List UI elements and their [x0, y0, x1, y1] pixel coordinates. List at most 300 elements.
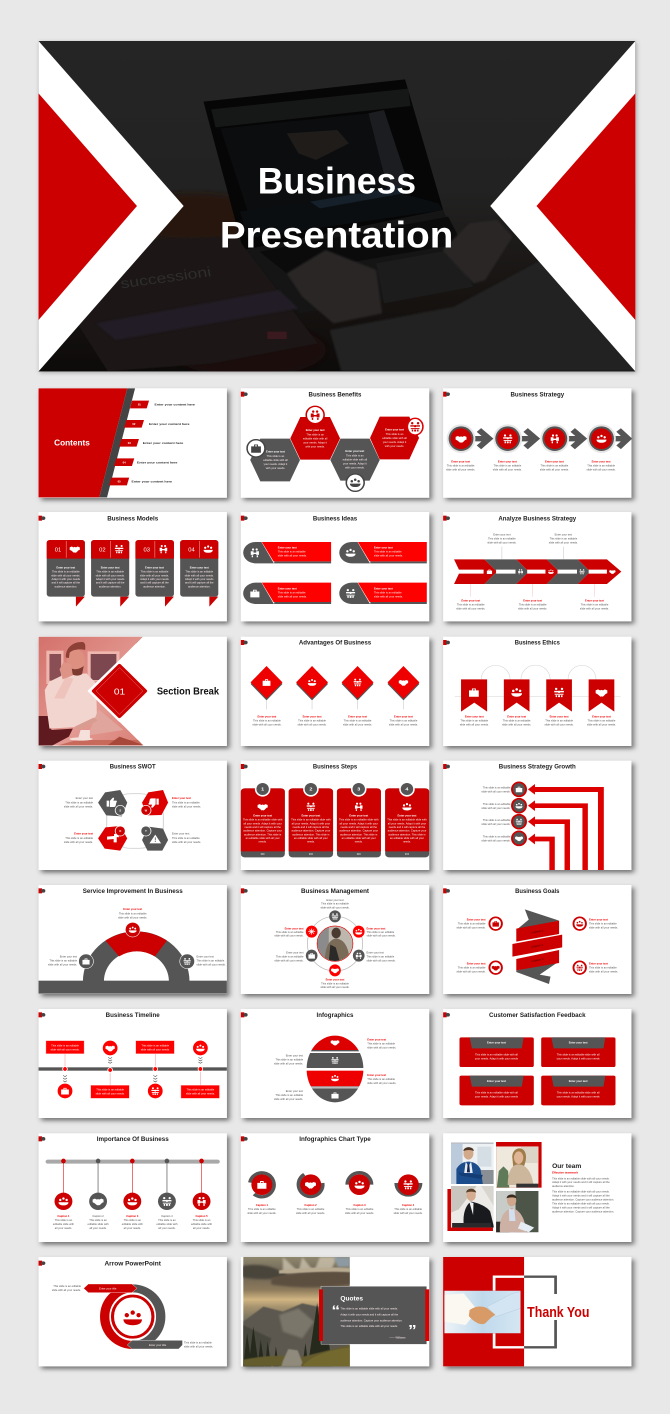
model card 1: audience attention.	[55, 586, 77, 589]
ethics captions: Enter your text	[507, 716, 526, 719]
step card 3: Enter your text	[349, 814, 368, 817]
swot shapes	[98, 790, 168, 851]
ethics captions: slide with all your needs.	[545, 724, 574, 727]
slide: Service Improvement In Business	[39, 885, 227, 994]
diamonds with stems	[251, 666, 419, 709]
strategy captions: Enter your text	[498, 460, 517, 463]
management captions	[274, 899, 396, 989]
swot captions: slide with all your needs.	[172, 841, 201, 844]
slide: Advantages Of Business	[241, 637, 429, 746]
circular arrows: Enter your title	[99, 1288, 117, 1291]
model card 4: and it will capture all the	[185, 582, 214, 585]
importance captions: editable slide with	[156, 1223, 178, 1226]
goals captions: Enter your text	[589, 963, 608, 966]
infographics captions	[274, 1038, 397, 1101]
ethics captions: slide with all your needs.	[502, 724, 532, 727]
slide: Our team	[443, 1133, 631, 1242]
ethics captions: This slide is an editable	[460, 720, 489, 723]
infographics captions: This slide is an editable	[275, 1059, 304, 1062]
step card 1: 1	[261, 787, 264, 793]
analyze connectors	[471, 547, 594, 597]
chart captions: slide with all your needs.	[394, 1212, 423, 1215]
hexagon texts: with your needs.	[266, 467, 286, 470]
hexagon texts: Enter your text	[266, 451, 285, 454]
contents list: 02	[132, 423, 136, 426]
importance captions: This slide is an	[158, 1219, 176, 1222]
photo: man in blue suit	[451, 1142, 494, 1184]
slide: Business Benefits: Business Benefits	[309, 390, 361, 398]
goals icon rings	[489, 917, 586, 974]
importance captions	[53, 1215, 213, 1230]
step card 3: 3	[357, 787, 360, 793]
slide: Customer Satisfaction Feedback	[443, 1009, 631, 1118]
hexagon texts: your needs. Adapt it	[383, 441, 407, 444]
step card 2: audience attention. This slide is	[292, 833, 330, 836]
hero background photo: laptop on desk	[39, 41, 635, 377]
step card 2: This slide is an editable slide with	[291, 819, 331, 822]
our team body text: Adapt it with your needs and it will capture all the	[552, 1206, 610, 1209]
chart captions	[247, 1204, 423, 1215]
step card 2: an editable slide with all your	[294, 837, 328, 840]
hexagon texts: Enter your text	[385, 428, 404, 431]
our team body text: audience attention.	[552, 1185, 575, 1188]
advantages captions: slide with all your needs.	[252, 724, 282, 727]
chart captions: slide with all your needs.	[345, 1212, 374, 1215]
swot shapes: W	[145, 809, 148, 812]
slide: Infographics Chart Type	[241, 1133, 429, 1242]
hexagon texts: This slide is an	[386, 433, 404, 436]
slide: Customer Satisfaction Feedback: Customer Satisfaction Feedback	[489, 1011, 586, 1019]
step card 2: all your needs. Adapt it with your	[292, 822, 330, 825]
model card 2: and it will capture all the	[96, 582, 125, 585]
model card 3: This slide is an editable	[141, 571, 169, 574]
hexagon texts: with your needs.	[305, 445, 325, 448]
twisted ribbon: Caption 1	[531, 928, 545, 934]
feedback card 1: Enter your text	[487, 1042, 506, 1045]
analyze captions: slide with all your needs.	[518, 608, 547, 611]
step card 1: all your needs. Adapt it with your	[243, 822, 282, 825]
analyze captions: slide with all your needs.	[456, 608, 486, 611]
feedback card 2: your needs. Adapt it with your needs	[557, 1057, 600, 1060]
importance captions: editable slide with	[191, 1223, 213, 1226]
swot captions: slide with all your needs.	[172, 806, 201, 809]
row 7 and 8 of slides	[39, 1133, 631, 1366]
idea 1	[243, 542, 331, 563]
segmented egg chart	[306, 1036, 364, 1102]
growth captions: slide with all your needs.	[481, 790, 511, 793]
gray arrows	[472, 430, 628, 447]
importance captions: editable slide with	[122, 1223, 144, 1226]
chart captions: This slide is an editable	[297, 1208, 325, 1211]
idea 2	[339, 542, 427, 563]
step card 1: This slide is an editable slide with	[243, 819, 283, 822]
analyze captions: Enter your text	[523, 600, 542, 603]
importance captions: editable slide with	[88, 1223, 109, 1226]
timeline boxes: slide with all your needs.	[141, 1048, 170, 1051]
hexagon texts: editable slide with all	[263, 459, 288, 462]
landscape photo	[240, 1257, 353, 1366]
hero slide: Business Presentation cover	[39, 41, 635, 377]
step card 2: audience attention. Capture your	[292, 830, 330, 833]
hexagon texts: your needs. Adapt it	[343, 463, 367, 466]
row 3 and 4 of slides	[39, 637, 631, 870]
slide: Business SWOT: Business SWOT	[110, 762, 156, 771]
ethics captions: Enter your text	[592, 716, 611, 719]
step card 3: an editable slide with all your	[342, 837, 376, 840]
quote panel: ”	[408, 1323, 417, 1339]
timeline boxes: This slide is an editable	[141, 1044, 170, 1047]
step card 1: Enter your text	[253, 814, 272, 817]
our team body text: audience attention. Capture your audience attention.	[552, 1198, 614, 1201]
analyze captions: This slide is an editable	[581, 604, 609, 607]
chart captions: Caption 3	[353, 1204, 366, 1207]
slide: Analyze Business Strategy: Analyze Business Strategy	[498, 514, 576, 522]
model card 3: Adapt it with your needs	[140, 578, 170, 581]
slide: Infographics	[241, 1009, 429, 1118]
step card 4	[385, 781, 429, 857]
hexagon texts: your needs. Adapt it	[303, 441, 327, 444]
slide: Section Break	[39, 637, 227, 747]
importance captions: all your needs.	[124, 1227, 141, 1230]
model card 2: This slide is an editable	[96, 571, 125, 574]
model card 4: Enter your text	[190, 567, 209, 570]
slide: Service Improvement In Business: Service Improvement In Business	[83, 887, 183, 895]
hero title: Business	[258, 160, 416, 202]
importance captions: all your needs.	[89, 1227, 107, 1230]
model card 1: Enter your text	[56, 567, 75, 570]
analyze captions: Enter your text	[555, 533, 572, 536]
swot captions: Enter your text	[172, 832, 190, 835]
hexagon texts: editable slide with all	[343, 459, 368, 462]
step card 4: audience attention. Capture your	[388, 830, 427, 833]
importance captions: This slide is an	[123, 1219, 142, 1222]
model card 3	[135, 540, 174, 607]
timeline boxes: slide with all your needs.	[186, 1093, 215, 1096]
hexagon texts: This slide is an	[306, 433, 325, 436]
step card 2: Enter your text	[301, 814, 320, 817]
hero title: Presentation	[220, 214, 453, 256]
advantages captions: Enter your text	[394, 716, 413, 719]
goals captions: Enter your text	[467, 919, 486, 922]
step card 1: audience attention. Capture your	[243, 830, 282, 833]
management captions: This slide is an editable	[276, 931, 304, 934]
strategy captions: Enter your text	[545, 460, 564, 463]
analyze captions: This slide is an editable	[549, 537, 578, 540]
idea 2: Enter your text	[374, 547, 393, 550]
service captions: Enter your text	[197, 956, 214, 959]
idea 2: slide with all your needs.	[374, 555, 403, 558]
quote panel: “	[331, 1304, 340, 1319]
ethics captions: This slide is an editable	[545, 720, 574, 723]
management captions: Enter your text	[326, 979, 345, 982]
quote panel: audience attention. Capture your audience attention.	[340, 1319, 403, 1322]
infographics captions: Enter your text	[286, 1090, 303, 1093]
hexagon texts: Enter your text	[345, 450, 364, 453]
growth captions: This slide is an editable	[483, 786, 511, 789]
contents list: 01	[138, 404, 141, 407]
slide: Business Ethics: Business Ethics	[515, 638, 560, 647]
tinted photo of man on phone	[39, 637, 144, 747]
idea 4: slide with all your needs.	[374, 595, 403, 598]
advantages captions	[252, 716, 418, 727]
management captions: This slide is an editable	[276, 955, 304, 958]
goals captions: slide with all your needs.	[589, 971, 618, 974]
slide: Section Break: Section Break	[157, 686, 220, 697]
swot captions: This slide is an editable	[65, 837, 94, 840]
step card 4: audience attention. This slide is	[388, 833, 426, 836]
service captions: slide with all your needs.	[118, 916, 148, 919]
contents list: 05	[118, 481, 121, 484]
our team heading: Effective teamwork	[552, 1172, 579, 1175]
step card 2: •••	[309, 852, 314, 856]
model card 4: slide with all your needs.	[185, 574, 214, 577]
swot captions: slide with all your needs.	[64, 806, 93, 809]
slide: Business Goals: Business Goals	[515, 887, 559, 895]
strategy captions: This slide is an editable	[493, 465, 522, 468]
idea 3	[243, 583, 331, 604]
idea 4	[339, 583, 427, 604]
strategy captions: This slide is an editable	[587, 465, 616, 468]
slide: Business Strategy Growth	[443, 761, 631, 870]
step card 4: all your needs. Adapt it with your	[388, 822, 426, 825]
management captions: slide with all your needs.	[274, 935, 304, 938]
advantages captions: This slide is an editable	[390, 720, 418, 723]
swot captions: slide with all your needs.	[64, 841, 93, 844]
step card 2	[289, 781, 333, 857]
chevron arrow chain	[454, 559, 621, 584]
model card 3: slide with all your needs.	[140, 574, 169, 577]
slide: Business Benefits	[241, 388, 429, 498]
strategy captions: slide with all your needs.	[587, 469, 616, 472]
service captions: This slide is an editable	[49, 960, 78, 963]
step card 4: •••	[405, 852, 410, 856]
goals captions: This slide is an editable	[458, 923, 486, 926]
slide: Contents: Contents	[54, 437, 90, 448]
swot captions	[64, 797, 201, 844]
swot captions: Enter your text	[74, 832, 93, 835]
timeline boxes: This slide is an editable	[96, 1089, 125, 1092]
chart captions: Caption 2	[304, 1204, 317, 1207]
our team body text: This slide is an editable slide with all your needs.	[552, 1191, 610, 1194]
feedback card 4: This slide is an editable slide with all	[557, 1092, 600, 1095]
step card 1: •••	[261, 852, 265, 856]
arch icon circles	[79, 922, 195, 969]
model card 1: slide with all your needs.	[51, 574, 81, 577]
analyze captions: slide with all your needs.	[549, 541, 578, 544]
hexagon texts: your needs. Adapt it	[264, 463, 288, 466]
step card 3: audience attention. Capture your	[339, 830, 378, 833]
idea 4: Enter your text	[374, 587, 393, 590]
slide: Business Management	[241, 885, 429, 994]
quote panel: Adapt it with your needs and it will capture all the	[340, 1313, 399, 1316]
step card 3: needs.	[355, 840, 363, 843]
idea 1: Enter your text	[278, 547, 297, 550]
slide: Infographics Chart Type: Infographics Chart Type	[299, 1135, 371, 1143]
chart captions: Caption 4	[402, 1204, 415, 1207]
feedback card 3: your needs. Adapt it with your needs	[475, 1096, 519, 1099]
slide: Business Timeline: Business Timeline	[106, 1011, 160, 1019]
hexagon texts: Enter your text	[306, 429, 325, 432]
section diamond: 01	[114, 686, 125, 696]
hexagon texts: This slide is an	[267, 455, 285, 458]
ethics captions: slide with all your needs.	[587, 724, 616, 727]
analyze captions: Enter your text	[585, 600, 604, 603]
slide: Importance Of Business	[39, 1133, 227, 1242]
strategy captions: This slide is an editable	[541, 465, 569, 468]
step card 1: an editable slide with all your	[246, 837, 280, 840]
model card 1: Adapt it with your needs	[52, 578, 81, 581]
swot captions: Enter your text	[76, 797, 93, 800]
model card 3: and it will capture all the	[140, 582, 169, 585]
slide: Thank You: Thank You	[527, 1305, 589, 1321]
importance captions: Caption 4	[161, 1215, 173, 1218]
hexagon texts: with your needs.	[345, 467, 365, 470]
slide: Arrow PowerPoint	[39, 1257, 227, 1366]
infographics captions: slide with all your needs.	[274, 1063, 303, 1066]
step card 4: an editable slide with all your	[390, 837, 424, 840]
step card 4: needs.	[403, 840, 411, 843]
step card 3: This slide is an editable slide with	[339, 819, 379, 822]
timeline boxes: slide with all your needs.	[50, 1048, 80, 1051]
analyze captions: slide with all your needs.	[580, 608, 609, 611]
model card 3: audience attention.	[143, 586, 166, 589]
our team body text: This slide is an editable slide with all your needs.	[552, 1202, 610, 1205]
advantages captions: slide with all your needs.	[298, 724, 327, 727]
slide: Business Ethics	[443, 637, 631, 746]
feedback card 1: your needs. Adapt it with your needs	[475, 1057, 519, 1060]
photo: woman	[496, 1146, 538, 1188]
ribbons	[461, 679, 614, 712]
contents list	[109, 401, 196, 485]
management captions: slide with all your needs.	[367, 959, 396, 962]
circular arrows	[84, 1284, 182, 1349]
idea 1: slide with all your needs.	[278, 555, 307, 558]
management captions: This slide is an editable	[367, 955, 395, 958]
analyze captions	[456, 533, 609, 611]
growth captions: slide with all your needs.	[481, 807, 511, 810]
strategy captions: slide with all your needs.	[493, 469, 522, 472]
contents list: 04	[123, 461, 126, 464]
infographics captions: Enter your text	[367, 1038, 386, 1041]
advantages captions: Enter your text	[348, 716, 367, 719]
goals captions	[456, 919, 618, 974]
our team heading	[552, 1162, 581, 1175]
strategy captions: slide with all your needs.	[540, 469, 569, 472]
model card 1: 01	[55, 548, 61, 554]
quote panel: This slide is an editable slide with all your needs.	[340, 1308, 398, 1311]
arrow captions: slide with all your needs.	[184, 1346, 213, 1349]
hexagon texts: editable slide with all	[382, 437, 407, 440]
timeline bar and stems	[39, 1054, 227, 1085]
model card 4: Adapt it with your needs	[185, 578, 214, 581]
partial ring charts	[250, 1173, 420, 1197]
slide: Business Strategy: Business Strategy	[510, 390, 564, 398]
row 1 and 2 of slides	[39, 388, 631, 621]
ethics captions: This slide is an editable	[588, 720, 616, 723]
management captions: Enter your text	[367, 928, 386, 931]
hero title	[220, 160, 453, 256]
photo: man in black suit	[451, 1186, 494, 1228]
growth captions: This slide is an editable	[483, 803, 511, 806]
step card 2: needs.	[307, 840, 315, 843]
strategy captions	[446, 460, 616, 472]
bent red arrows	[528, 784, 604, 870]
slide: Infographics: Infographics	[317, 1011, 353, 1019]
contents list: 03	[128, 442, 131, 445]
contents list: Enter your content here	[149, 422, 190, 426]
advantages captions: Enter your text	[303, 716, 322, 719]
management captions: Enter your text	[326, 899, 344, 902]
management captions: Enter your text	[286, 952, 304, 955]
swot captions: This slide is an editable	[172, 802, 200, 805]
step card 4: needs and it will capture all the	[389, 826, 426, 829]
feedback card 1	[459, 1037, 534, 1067]
swot shapes: S	[119, 809, 122, 812]
slide: Business Strategy Growth: Business Strategy Growth	[499, 762, 576, 771]
step card 3: needs and it will capture all the	[340, 826, 378, 829]
step card 3: audience attention. This slide is	[340, 833, 378, 836]
idea 3: Enter your text	[278, 587, 297, 590]
step card 2: 2	[309, 787, 313, 793]
quote panel	[319, 1286, 429, 1344]
red photo frames	[447, 1142, 542, 1231]
goals captions: This slide is an editable	[589, 923, 617, 926]
square frames	[494, 1277, 556, 1347]
model card 2: audience attention.	[99, 586, 122, 589]
our team body text: Adapt it with your needs and it will capture all the	[552, 1195, 610, 1198]
importance captions: all your needs.	[158, 1227, 176, 1230]
service captions: Enter your text	[123, 908, 142, 911]
analyze captions: This slide is an editable	[519, 604, 547, 607]
strategy captions: This slide is an editable	[447, 465, 475, 468]
model card 3: 03	[143, 548, 150, 554]
management captions: This slide is an editable	[321, 903, 350, 906]
model card 4: 04	[188, 548, 195, 554]
goals captions: Enter your text	[589, 919, 608, 922]
idea 1: This slide is an editable	[278, 551, 306, 554]
step card 1: needs.	[259, 840, 267, 843]
importance captions: Caption 3	[126, 1215, 139, 1218]
swot captions: This slide is an editable	[172, 837, 200, 840]
management captions: slide with all your needs.	[320, 906, 350, 909]
advantages captions: slide with all your needs.	[389, 724, 418, 727]
twisted ribbon: Caption 2	[531, 943, 544, 949]
slide: Business Timeline	[39, 1009, 227, 1118]
feedback card 2	[541, 1037, 615, 1067]
advantages captions: This slide is an editable	[344, 720, 372, 723]
chart captions: slide with all your needs.	[247, 1212, 277, 1215]
strategy circles	[447, 424, 616, 453]
importance captions: editable slide with	[53, 1223, 75, 1226]
arrow captions: This slide is an editable	[184, 1342, 212, 1345]
step card 4: 4	[405, 787, 409, 793]
arrow captions	[52, 1285, 213, 1349]
step card 1	[241, 781, 285, 857]
timeline boxes: slide with all your needs.	[96, 1093, 125, 1096]
slide: Business Management: Business Management	[301, 887, 370, 895]
model card 4: audience attention.	[188, 586, 211, 589]
goals captions: slide with all your needs.	[456, 971, 486, 974]
step card 2: needs and it will capture all the	[293, 826, 330, 829]
slide: Quotes	[240, 1257, 429, 1366]
handshake photo	[444, 1291, 521, 1333]
service captions: This slide is an editable	[197, 960, 225, 963]
chart captions: Caption 1	[256, 1204, 269, 1207]
hero background photo: laptop on desk: successioni	[119, 264, 212, 292]
section diamond	[88, 660, 151, 722]
chart captions: This slide is an editable	[394, 1208, 423, 1211]
twisted ribbon: Caption 3	[531, 957, 545, 963]
